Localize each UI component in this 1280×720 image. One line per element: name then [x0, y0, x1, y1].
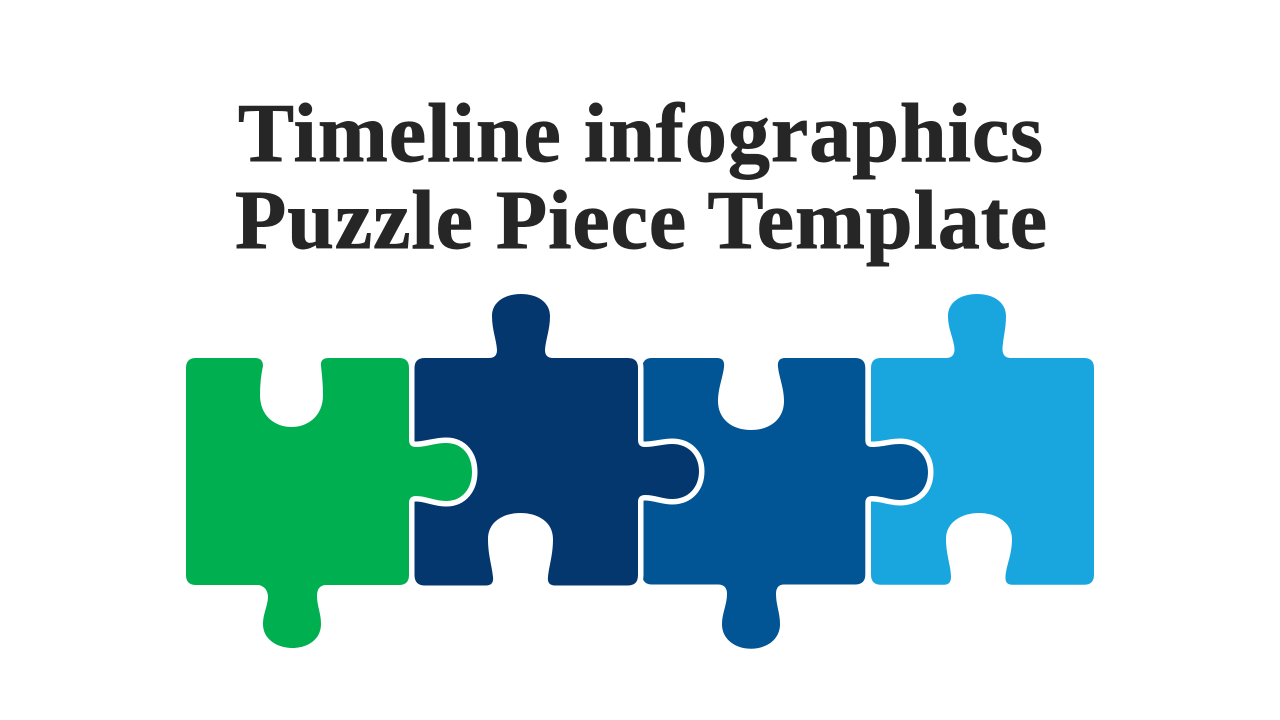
- title: [235, 87, 1047, 267]
- puzzle timeline: [186, 294, 1094, 649]
- puzzle piece 1: green: [186, 358, 472, 648]
- puzzle piece 3: medium blue: [642, 358, 928, 649]
- title line 1: Timeline infographics: [238, 87, 1043, 180]
- title line 2: Puzzle Piece Template: [235, 174, 1047, 267]
- puzzle piece 2: navy: [414, 294, 699, 586]
- puzzle piece 4: light blue: [871, 294, 1094, 585]
